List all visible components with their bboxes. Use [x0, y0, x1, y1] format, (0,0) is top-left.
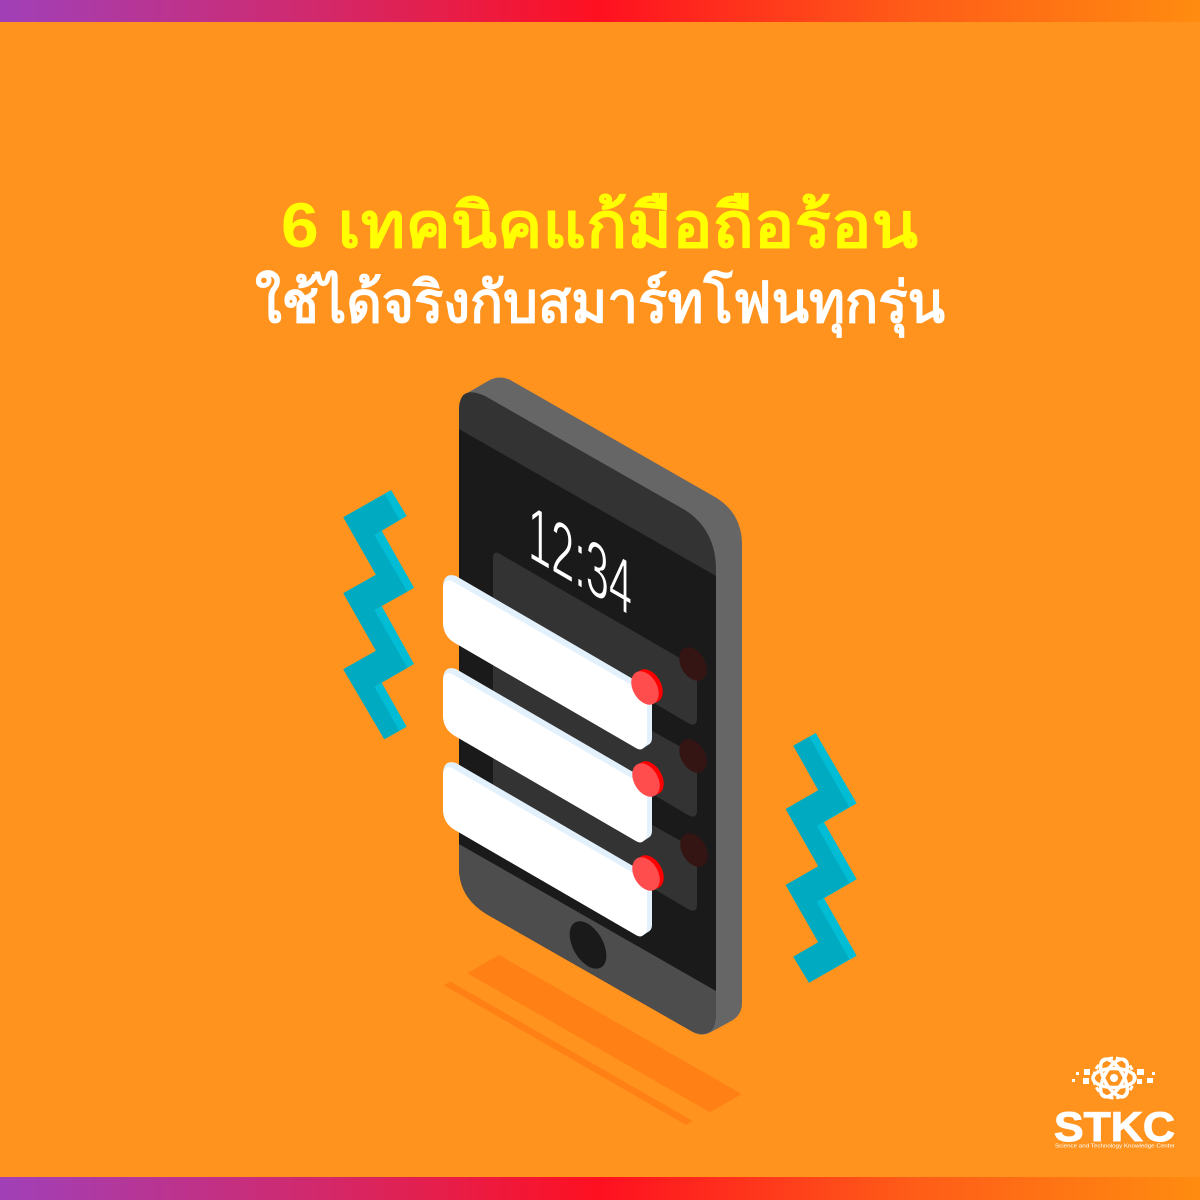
home button — [562, 915, 614, 975]
phone screen — [459, 429, 716, 991]
dimmed notification dots — [674, 642, 713, 872]
left vibration zigzag — [343, 490, 414, 739]
STKC logo — [1054, 1055, 1175, 1150]
notification card 1 — [443, 575, 668, 749]
phone front face — [459, 392, 716, 1034]
logo pixel squares — [1072, 1069, 1155, 1084]
notification card 3 — [443, 762, 669, 936]
title line 1: 6 เทคนิคแก้มือถือร้อน — [281, 191, 918, 261]
logo wordmark: STKC — [1054, 1103, 1175, 1150]
bottom gradient bar — [0, 1177, 1200, 1200]
right vibration zigzag — [786, 733, 857, 983]
phone lower bezel — [459, 844, 716, 1034]
title — [255, 191, 945, 339]
title line 2: ใช้ได้จริงกับสมาร์ทโฟนทุกรุ่น — [255, 268, 945, 339]
notification card 2 — [443, 668, 669, 842]
background notification panels — [493, 553, 697, 911]
logo tagline: Science and Technology Knowledge Center — [1055, 1144, 1175, 1150]
smartphone — [443, 378, 742, 1034]
clock: 12:34 — [528, 486, 632, 634]
floor shadow — [443, 955, 742, 1125]
top gradient bar — [0, 0, 1200, 22]
phone side body — [459, 378, 742, 1034]
logo atom icon — [1093, 1055, 1135, 1101]
